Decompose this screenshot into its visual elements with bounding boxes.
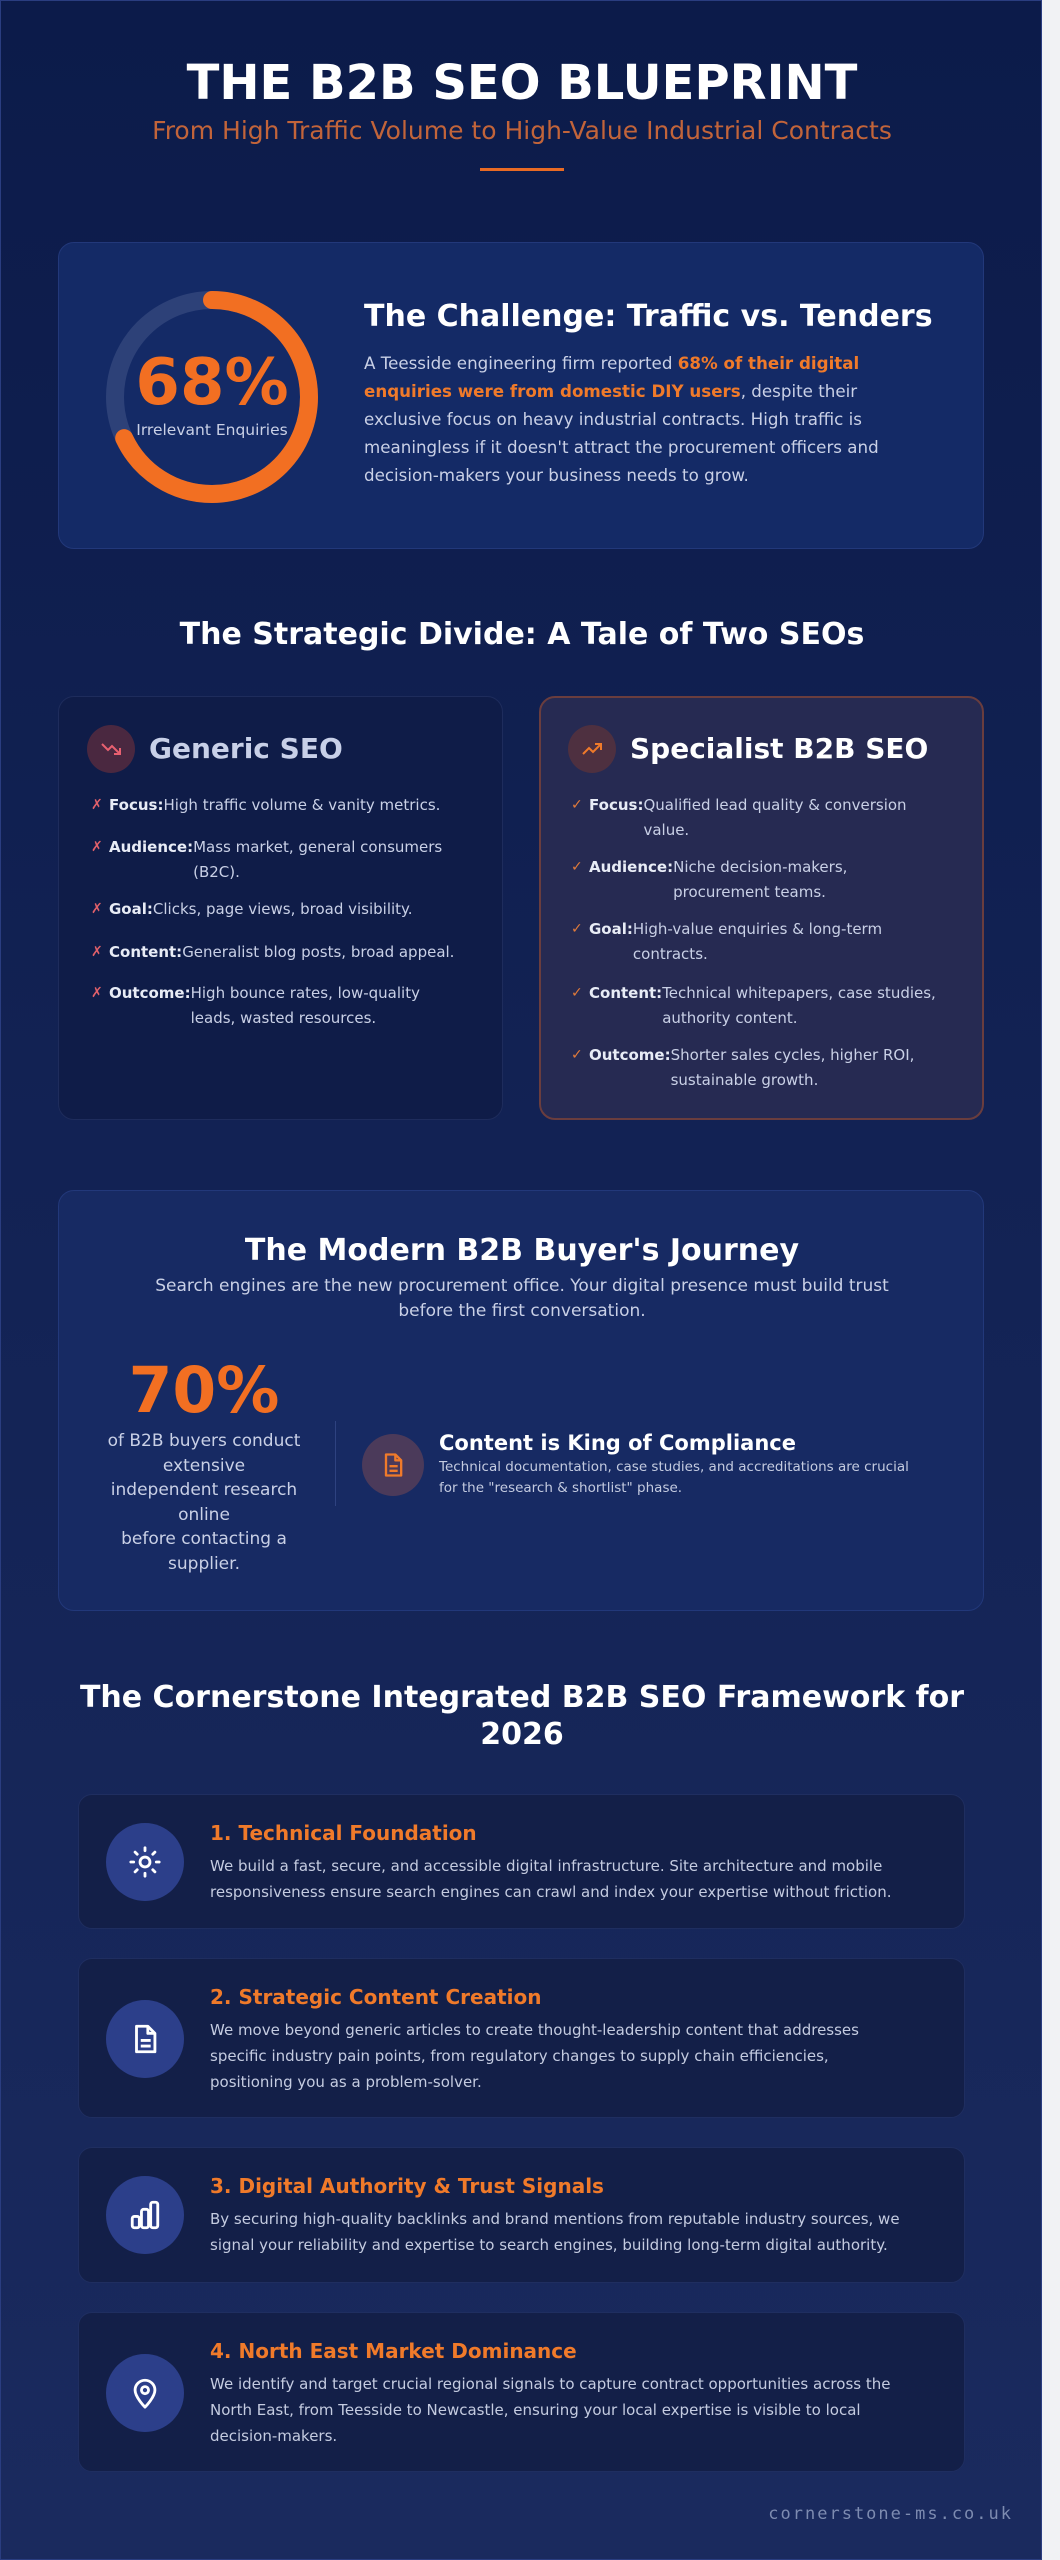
stat: 70%: extensive <box>163 1456 245 1476</box>
donut chart 68%: Irrelevant Enquiries <box>136 421 288 439</box>
generic list: Content: <box>109 943 182 961</box>
donut chart 68%: 68% <box>135 346 289 420</box>
subtitle: From High Traffic Volume to High-Value Industrial Contracts <box>152 116 892 145</box>
generic list: ✗ <box>91 944 103 960</box>
panel: generic SEO <box>58 696 503 1120</box>
specialist list: ✓ <box>571 859 583 875</box>
stat: 70%: before contacting a <box>121 1529 287 1549</box>
title: THE B2B SEO BLUEPRINT <box>187 55 857 111</box>
generic list: Mass market, general consumers (B2C). <box>193 838 442 881</box>
stat: 70%: 70% <box>129 1354 279 1427</box>
icon: bar chart <box>106 2176 184 2254</box>
panel: digital authority: By securing high-quality backlinks and brand mentions from reputable industry sources, we signal your reliability and expertise to search engines, building long-term digital authority. <box>210 2210 900 2254</box>
generic list: ✗ <box>91 901 103 917</box>
specialist list: Shorter sales cycles, higher ROI, sustainable growth. <box>671 1046 914 1089</box>
stat: 70%: online <box>178 1504 230 1524</box>
heading: strategic divide: The Strategic Divide: A Tale of Two SEOs <box>180 617 864 652</box>
generic list: Audience: <box>109 838 193 856</box>
specialist list: Content: <box>589 984 662 1002</box>
panel: north east: 4. North East Market Dominance <box>210 2339 577 2363</box>
panel: technical foundation <box>78 1794 965 1929</box>
panel: digital authority <box>78 2147 965 2283</box>
specialist list: Niche decision-makers, procurement teams. <box>673 858 847 901</box>
panel: digital authority: 3. Digital Authority & Trust Signals <box>210 2174 604 2198</box>
panel: technical foundation: 1. Technical Foundation <box>210 1821 477 1845</box>
specialist list: Audience: <box>589 858 673 876</box>
journey heading: The Modern B2B Buyer's Journey <box>245 1233 799 1268</box>
icon: trend down <box>87 725 135 773</box>
specialist list: ✓ <box>571 797 583 813</box>
specialist list: Technical whitepapers, case studies, authority content. <box>662 984 936 1027</box>
panel: strategic content: 2. Strategic Content Creation <box>210 1985 541 2009</box>
icon: map pin <box>106 2354 184 2432</box>
specialist list: ✓ <box>571 985 583 1001</box>
specialist list: High-value enquiries & long-term contracts. <box>633 920 882 963</box>
callout: content is king <box>438 1431 909 1496</box>
generic list: ✗ <box>91 839 103 855</box>
generic list: ✗ <box>91 797 103 813</box>
specialist list: Goal: <box>589 920 633 938</box>
generic list: ✗ <box>91 985 103 1001</box>
generic list: High traffic volume & vanity metrics. <box>163 796 440 814</box>
generic list: High bounce rates, low-quality leads, wasted resources. <box>191 984 420 1027</box>
callout: content is king: Technical documentation, case studies, and accreditations are crucial for the "research & shortlist" phase. <box>439 1459 909 1496</box>
stat: 70%: independent research <box>111 1480 297 1500</box>
challenge text: A Teesside engineering firm reported 68% of their digital enquiries were from domestic DIY users, despite their exclusive focus on heavy industrial contracts. High traffic is meaningless if it doesn't attract the procurement officers and decision-makers your business needs to grow. <box>364 353 879 485</box>
stat: 70% <box>108 1354 300 1574</box>
panel: challenge <box>58 242 984 549</box>
generic list: Clicks, page views, broad visibility. <box>153 900 413 918</box>
journey subtitle: Search engines are the new procurement office. Your digital presence must build trust before the first conversation. <box>155 1276 889 1321</box>
specialist list: Focus: <box>589 796 643 814</box>
specialist list <box>571 796 936 1089</box>
stat: 70%: supplier. <box>168 1554 240 1574</box>
icon: gear/sun <box>106 1823 184 1901</box>
icon: document <box>106 2000 184 2078</box>
specialist heading: Specialist B2B SEO <box>630 732 928 765</box>
specialist list: ✓ <box>571 921 583 937</box>
generic list: Generalist blog posts, broad appeal. <box>182 943 454 961</box>
panel: buyer's journey <box>58 1190 984 1611</box>
generic list: Goal: <box>109 900 153 918</box>
generic list: Outcome: <box>109 984 191 1002</box>
icon: trend up <box>568 725 616 773</box>
generic list <box>91 796 454 1027</box>
specialist list: Outcome: <box>589 1046 671 1064</box>
panel: north east: We identify and target crucial regional signals to capture contract opportunities across the North East, from Teesside to Newcastle, ensuring your local expertise is visible to local decision-makers. <box>210 2375 890 2445</box>
generic heading: Generic SEO <box>149 732 343 765</box>
panel: technical foundation: We build a fast, secure, and accessible digital infrastructure. Site architecture and mobile responsiveness ensure search engines can crawl and index your expertise without friction. <box>210 1857 892 1901</box>
stat: 70%: of B2B buyers conduct <box>108 1431 300 1451</box>
heading: framework: The Cornerstone Integrated B2B SEO Framework for 2026 <box>80 1680 964 1752</box>
panel: north east <box>78 2312 965 2472</box>
panel: specialist B2B SEO <box>539 696 984 1120</box>
specialist list: ✓ <box>571 1047 583 1063</box>
panel: strategic content: We move beyond generic articles to create thought-leadership content that addresses specific industry pain points, from regulatory changes to supply chain efficiencies, positioning you as a problem-solver. <box>210 2021 859 2091</box>
donut chart 68% <box>106 291 318 503</box>
challenge heading: The Challenge: Traffic vs. Tenders <box>364 299 933 334</box>
generic list: Focus: <box>109 796 163 814</box>
callout: content is king: Content is King of Compliance <box>439 1431 796 1455</box>
specialist list: Qualified lead quality & conversion value. <box>643 796 907 839</box>
panel: strategic content <box>78 1958 965 2118</box>
icon: document <box>362 1434 424 1496</box>
footer url: cornerstone-ms.co.uk <box>768 2504 1013 2524</box>
